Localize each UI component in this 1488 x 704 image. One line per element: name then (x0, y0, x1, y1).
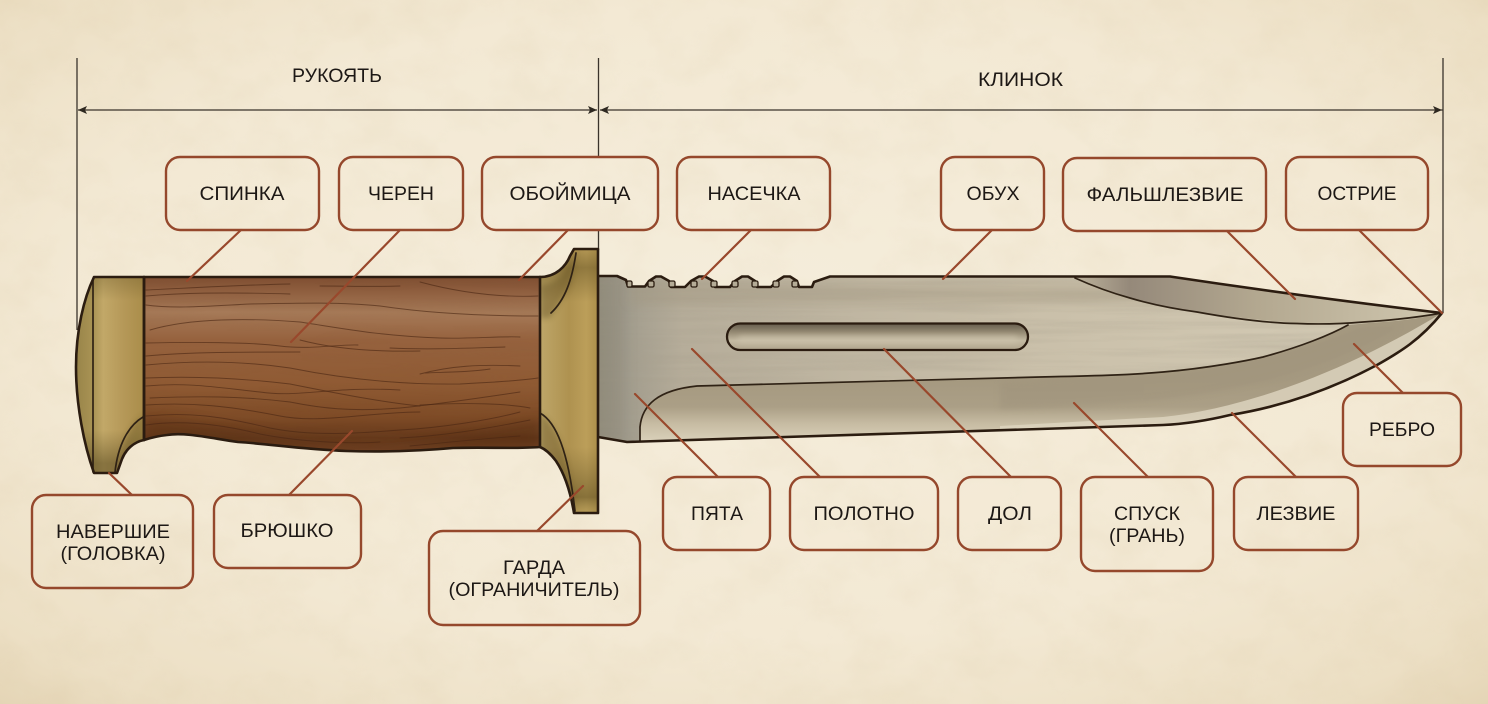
blade (585, 270, 1448, 445)
leader: lezvie (1232, 413, 1296, 477)
label: cheren: ЧЕРЕН (368, 184, 434, 205)
label: nasechka: НАСЕЧКА (708, 184, 801, 205)
leader: rebro (1354, 344, 1403, 393)
leader: dol (884, 349, 1011, 477)
label: obukh: ОБУХ (966, 184, 1020, 205)
leader: navershie (109, 473, 132, 495)
dimension: blade (600, 58, 1443, 313)
serration details (627, 281, 798, 287)
dimension: handle (77, 58, 598, 330)
label: lezvie (1234, 477, 1358, 550)
pommel (76, 277, 144, 475)
label: falshlezvie: ФАЛЬШЛЕЗВИЕ (1086, 185, 1244, 206)
label: polotno (790, 477, 938, 550)
label: oboymitsa (482, 157, 658, 230)
false edge (1075, 277, 1442, 324)
leader: nasechka (702, 230, 751, 279)
knife illustration (76, 249, 1448, 513)
label: spinka: СПИНКА (200, 184, 285, 205)
label: cheren (339, 157, 463, 230)
leader: garda (537, 486, 583, 531)
label: spusk (1081, 477, 1213, 571)
label: pyata (663, 477, 770, 550)
label: rebro (1343, 393, 1461, 466)
handle: wood scales (144, 277, 540, 452)
leader: oboymitsa (519, 230, 568, 280)
leader: obukh (943, 230, 992, 279)
label: dol (958, 477, 1061, 550)
leader: bryushko (289, 431, 352, 495)
label: falshlezvie (1063, 158, 1266, 231)
label: spusk: (ГРАНЬ) (1109, 526, 1185, 547)
guard (144, 249, 598, 513)
dimension: handle: РУКОЯТЬ (292, 66, 382, 87)
label: ostrie (1286, 157, 1428, 230)
leader: spinka (187, 230, 241, 281)
label: pyata: ПЯТА (691, 504, 743, 525)
leader: pyata (635, 394, 718, 477)
label: navershie: НАВЕРШИЕ (56, 522, 170, 543)
label: garda: ГАРДА (503, 558, 565, 579)
label: bryushko: БРЮШКО (240, 521, 334, 542)
label: oboymitsa: ОБОЙМИЦА (510, 183, 631, 205)
leader: falshlezvie (1227, 231, 1295, 299)
label: bryushko (214, 495, 361, 568)
leader: ostrie (1359, 230, 1442, 313)
dimension: blade: КЛИНОК (978, 70, 1063, 91)
label: garda (429, 531, 640, 625)
label: rebro: РЕБРО (1369, 420, 1435, 441)
label: spusk: СПУСК (1114, 504, 1180, 525)
label: ostrie: ОСТРИЕ (1318, 184, 1396, 205)
label: nasechka (677, 157, 830, 230)
label: obukh (941, 157, 1044, 230)
icon: fuller (727, 324, 1028, 350)
label: spinka (166, 157, 319, 230)
leader: spusk (1074, 403, 1148, 477)
label: navershie: (ГОЛОВКА) (60, 544, 166, 565)
leader: cheren (291, 230, 400, 342)
leader: polotno (692, 349, 820, 477)
label: navershie (32, 495, 193, 588)
grind (spusk) (640, 313, 1442, 442)
label: garda: (ОГРАНИЧИТЕЛЬ) (448, 580, 620, 601)
label: polotno: ПОЛОТНО (814, 504, 914, 525)
label: lezvie: ЛЕЗВИЕ (1256, 504, 1336, 525)
label: dol: ДОЛ (988, 504, 1032, 525)
